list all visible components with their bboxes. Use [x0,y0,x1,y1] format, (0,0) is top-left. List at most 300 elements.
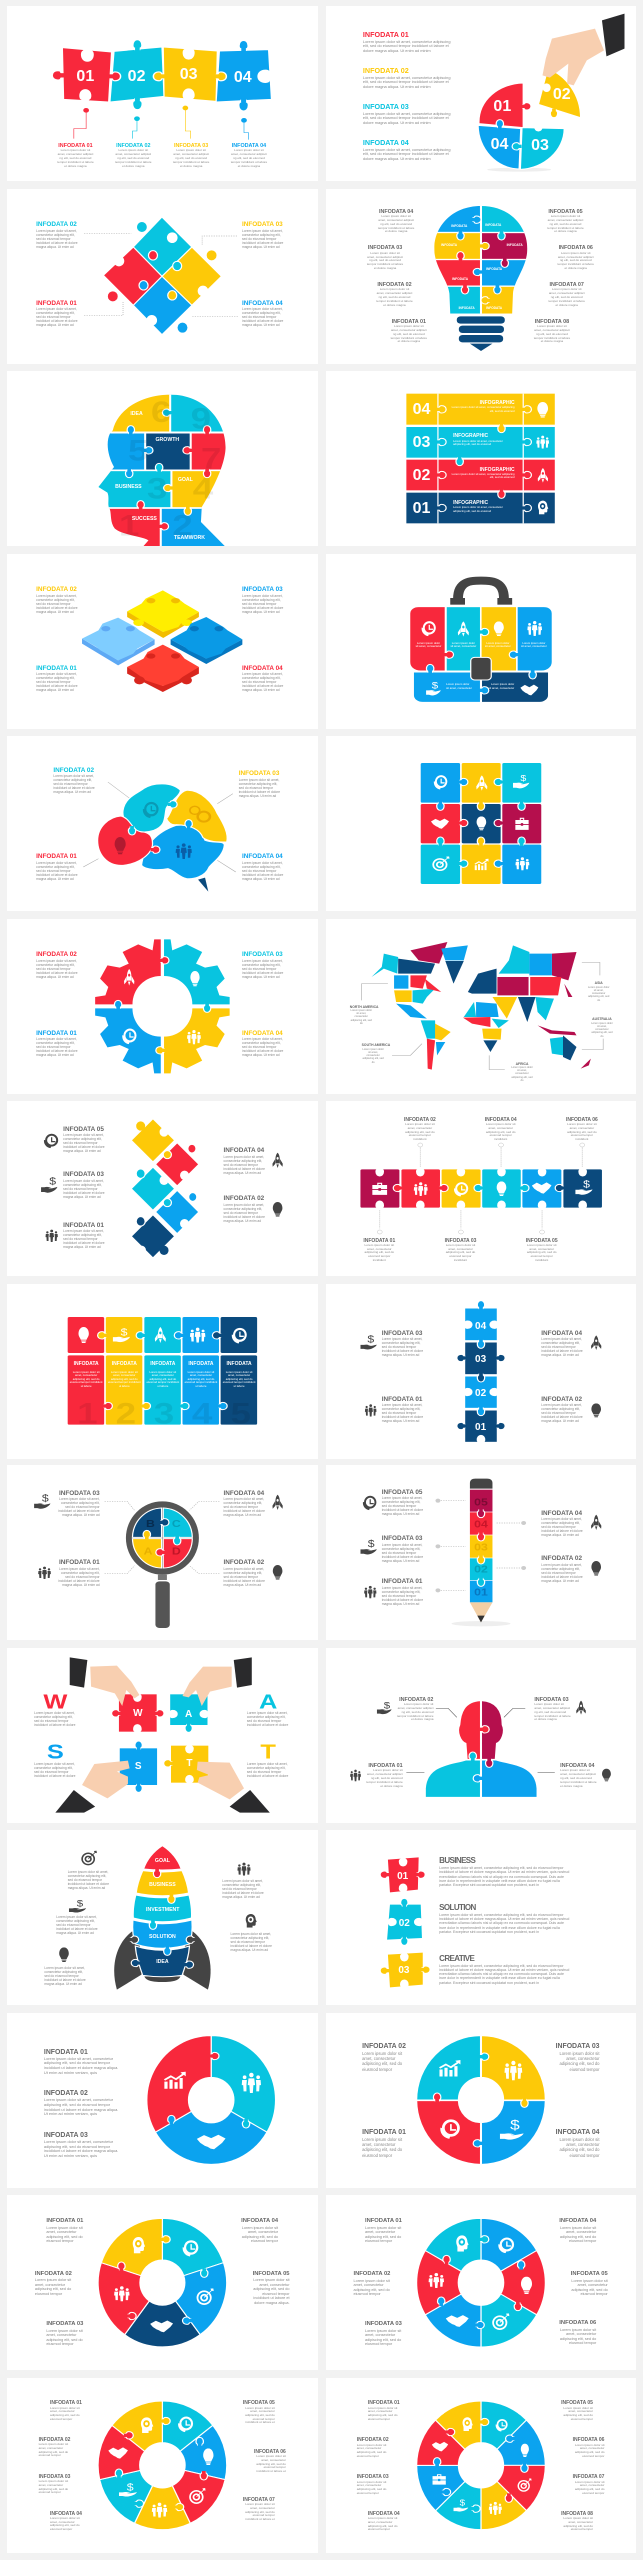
letters: B [146,1519,155,1530]
segment numbers: 01 [474,1588,487,1598]
text 01: Lorem ipsum dolor sit amet, consectetur adipiscing elit, sed do eiusmod tempor incididunt ut labore et dolore magna aliqua. Ut enim ad [382,1586,423,1606]
letters [144,1519,181,1558]
bulb glass pieces [434,206,528,314]
brain lobes [98,784,227,878]
text 03 [444,1238,477,1262]
text 02: Lorem ipsum dolor sit amet, consectetur adipiscing elit, sed do eiusmod tempor incididunt ut labore et dolore magna aliqua. Ut enim ad minim veniam, quis [44,2097,118,2116]
pieces [380,1857,430,1989]
label idea: IDEA [156,1959,169,1965]
text block 03: Lorem ipsum dolor sit amet, consectetur adipiscing elit, sed do eiusmod tempor incididunt ut labore et dolore magna aliqua. Ut enim ad [242,229,283,249]
card text: Lorem ipsum dolor sit amet, consectetur [485,641,511,648]
text block 03: INFODATA 03 [242,221,283,228]
faint numbers: 2 [172,509,193,542]
text 07: INFODATA 07 [573,2474,604,2480]
icons [122,969,201,1044]
text 04: Lorem ipsum dolor sit amet, consectetur adipisci ng elit, sed do eiusmod tempor incididunt ut labore et dolore magna [560,1768,597,1788]
letter S: S [135,1761,142,1772]
text block 03 [239,770,283,798]
text block 01: INFODATA 01 [36,665,77,672]
text block 01: INFODATA 01 [363,30,409,39]
dotted stems [377,1143,584,1234]
text 05: INFODATA 05 [253,2271,290,2277]
icons [350,1701,610,1781]
faint numbers: 3 [147,472,167,505]
text block 01: Lorem ipsum dolor sit amet, consectetur adipiscing elit, sed do eiusmod tempor incididunt ut labore et dolore magna aliqua. Ut enim ad [36,307,78,327]
text 02: INFODATA 02 [404,1117,436,1123]
text 04: Lorem ipsum dolor sit amet, consectetur adipiscing elit, sed do eiusmod tempor [242,2226,278,2243]
text 04: INFODATA 04 [224,1490,264,1497]
callout africa: AFRICA [516,1062,528,1066]
text block 01: INFODATA 01 [36,853,77,860]
text 01: INFODATA 01 [44,2049,88,2056]
number 01: 01 [397,1871,408,1882]
text block 02: Lorem ipsum dolor sit amet, consectetur adipiscing elit, sed do eiusmod tempor incididunt ut labore et dolore magna aliqua. Ut enim ad [224,1203,265,1223]
text S: Lorem ipsum dolor sit amet, consectetur adipiscing elit, sed do eiusmod tempor incididunt ut labore et dolore [34,1762,76,1778]
text 01: Lorem ipsum dolor sit amet, consectetur adipiscing elit, sed do eiusmod tempor [46,2226,83,2243]
callout north america: NORTH AMERICA [350,1005,378,1009]
text block 05: INFODATA 05 [63,1126,104,1133]
person graphic [326,1648,636,1823]
column text 5: INFODATA [227,1361,252,1367]
panel: head puzzle [7,371,318,546]
navy regions [398,958,576,1060]
panel: four part ring [326,2013,636,2188]
panel: five part ring [7,2195,318,2370]
text 01 [50,2400,84,2421]
dark icons: $ [49,1176,57,1187]
panel: three part ring [7,2013,318,2188]
text 04: Lorem ipsum dolor sit amet, consectetur adipiscing elit, sed do eiusmod tempor incididunt ut labore et dolore magna aliqua. Ut enim ad [541,1337,583,1357]
head pieces [94,392,228,546]
text 01: Lorem ipsum dolor sit amet, consectetur adipiscing elit, sed do eiusmod tempor incididunt ut labore et dolore magna aliqua. Ut enim ad [382,1403,423,1423]
icons: $ [520,774,527,783]
text A: Lorem ipsum dolor sit amet, consectetur adipiscing elit, sed do eiusmod tempor incididunt ut labore et dolore [247,1711,288,1727]
number 04: 04 [234,69,252,86]
text block 01 [63,1222,107,1249]
text 02 [404,1117,436,1142]
text 04: INFODATA 04 [541,1330,582,1337]
callout australia: Lorem ipsum dolor sit amet, consectetur adipiscing elit, sed do [591,1022,613,1038]
text 01: INFODATA 01 [368,2400,400,2406]
pencil graphic [326,1465,636,1640]
card text: Lorem ipsum dolor sit amet, consectetur [446,682,472,690]
diamond puzzle graphic [84,218,238,334]
text 05: Lorem ipsum dolor sit amet, consectetur adipiscing elit, sed do eiusmod tempor incididunt ut labore et [245,2406,275,2424]
text 04: Lorem ipsum dolor sit amet, consectetur adipiscing elit, sed do eiusmod tempor incididunt ut labore et dolore magna aliqua. Ut enim ad [224,1497,265,1517]
text 06 [252,2449,286,2474]
ring segments [98,2401,227,2529]
text block 02: Lorem ipsum dolor sit amet, consectetur adipiscing elit, sed do eiusmod tempor incididunt ut labore et dolore magna aliqua. Ut enim ad [53,774,95,794]
grid graphic [326,736,636,911]
number 01: 01 [493,98,511,115]
ring segments [416,2401,545,2529]
segment numbers: 05 [474,1498,487,1508]
big letters [43,1690,278,1763]
text creative [439,1953,570,1985]
letter W: W [133,1708,143,1719]
text solution [439,1902,570,1934]
text 03 [554,2042,600,2072]
icons [59,1851,257,1962]
number 04: 04 [475,1321,486,1332]
text business [439,1855,570,1887]
label goal: GOAL [155,1858,170,1864]
label solution: SOLUTION [149,1934,176,1940]
connector lines and dots [74,105,249,139]
text block 02 [363,66,450,89]
row text 01: INFOGRAPHIC [453,500,488,506]
panel: five rotated pieces [7,1101,318,1276]
text 01: Lorem ipsum dolor sit amet, consectetur adipisci ng elit, sed do eiusmod tempor incididunt ut labore et dolore magna [366,1768,403,1788]
text block 03 [363,102,450,125]
pieces [112,1692,210,1792]
text 02 [353,2271,393,2297]
dotted leaders [435,1499,526,1593]
panel: isometric puzzle [7,554,318,729]
text 04: Lorem ipsum dolor sit amet, consectetur adipiscing elit, sed do eiusmod tempor [559,2137,600,2158]
text block: infodata 01: INFODATA 01 [58,143,93,149]
label idea: IDEA [130,411,143,417]
text 05: INFODATA 05 [382,1489,422,1496]
faint numbers: 7 [201,442,221,475]
icons [114,2237,214,2332]
faint big numbers: 4 [192,1397,213,1430]
text 04: INFODATA 04 [50,2511,82,2517]
text 03: Lorem ipsum dolor sit amet, consectetur adipiscing elit, sed do eiusmod tempor incididunt [446,1243,475,1262]
text block 02: INFODATA 02 [36,951,77,958]
icons: $ [42,1494,50,1504]
row text 01 [453,500,503,513]
text 03: Lorem ipsum dolor sit amet, consectetur adipiscing elit, sed do eiusmod tempor incididunt ut labore et dolore magna aliqua. Ut enim ad [382,1543,423,1563]
panel: SWOT hands [7,1648,318,1823]
text 01 [44,2048,120,2075]
text 04 [368,2511,401,2532]
panel: six piece chain [326,1101,636,1276]
tabs [433,2053,528,2147]
text block 03: Lorem ipsum dolor sit amet, consectetur adipiscing elit, sed do eiusmod tempor incididunt ut labore et dolore magna aliqua. Ut enim ad minim [363,111,450,125]
text block 02: Lorem ipsum dolor sit amet, consectetur adipiscing elit, sed do eiusmod tempor incididunt ut labore et dolore magna aliqua. Ut enim ad [36,229,78,249]
ring graphic [7,2013,318,2188]
number 04: 04 [413,401,430,418]
magenta regions [410,942,590,1068]
text 01 [363,1238,396,1262]
text block 04 [363,138,450,161]
tabs [436,405,531,511]
text block 04: INFODATA 04 [242,665,283,672]
icons [439,2060,523,2140]
text block 03: Lorem ipsum dolor sit amet, consectetur adipisci ng elit, sed do eiusmod tempor incididunt ut labore et dolore magna [367,251,403,270]
text block: infodata 01: Lorem ipsum dolor sit amet, consectetur adipisci ng elit, sed do eiusmod tempor incididunt ut labore et dolore magna [57,148,94,168]
text 07: Lorem ipsum dolor sit amet, consectetur adipiscing elit, sed do eiusmod tempor [575,2480,604,2495]
yellow regions [394,990,517,1040]
text block 05: Lorem ipsum dolor sit amet, consectetur adipiscing elit, sed do eiusmod tempor incididunt ut labore et dolore magna aliqua. Ut enim ad [63,1133,105,1153]
panel: nine piece grid [326,736,636,911]
panel: diamond puzzle [7,189,318,364]
text block 04: Lorem ipsum dolor sit amet, consectetur adipiscing elit, sed do eiusmod tempor incididunt ut labore et dolore magna aliqua. Ut enim ad [242,861,283,881]
swot graphic [7,1648,318,1823]
text 05: INFODATA 05 [571,2271,608,2277]
text 03: Lorem ipsum dolor sit amet, consectetur adipiscing elit, sed do eiusmod tempor incididunt ut labore et dolore magna aliqua. Ut enim ad minim veniam, quis [44,2139,118,2158]
sleeves [55,1657,270,1813]
text block 01: INFODATA 01 [36,300,77,307]
blue piece [171,617,242,664]
ring segments [416,2218,545,2347]
panel: four puzzle pieces in a row [7,6,318,181]
text 06: INFODATA 06 [573,2437,604,2443]
ring graphic [7,2195,318,2370]
fins and nozzle [114,1932,211,1990]
text block 05: INFODATA 05 [548,209,583,215]
text block 08: Lorem ipsum dolor sit amet, consectetur adipisci ng elit, sed do eiusmod tempor incididunt ut labore et dolore magna [534,324,570,343]
row text 04 [452,400,515,413]
text 03: Lorem ipsum dolor sit amet, consectetur adipiscing elit, sed do eiusmod tempor [46,2329,83,2346]
text 03: Lorem ipsum dolor sit amet, consectetur adipiscing elit, sed do eiusmod tempor incididunt ut labore et dolore magna aliqua. Ut enim ad [58,1497,100,1517]
column text 4: Lorem ipsum dolor sit amet, consectetur adipiscing elit, sed do eiusmod tempor incididunt ut labore [185,1370,217,1388]
head graphic [98,394,226,546]
card text: Lorem ipsum dolor sit amet, consectetur [488,682,514,690]
text 01: INFODATA 01 [368,1763,403,1769]
text goal: Lorem ipsum dolor sit amet, consectetur adipiscing elit, sed do eiusmod tempor incididunt ut labore et dolore magna aliqua. Ut enim ad [68,1870,109,1890]
panel: pencil [326,1465,636,1640]
text creative: CREATIVE [439,1954,474,1963]
text 07: Lorem ipsum dolor sit amet, consectetur adipiscing elit, sed do eiusmod tempor incididunt ut labore et [245,2502,275,2521]
text 02: INFODATA 02 [224,1559,264,1566]
text 04: INFODATA 04 [560,1763,594,1769]
hand [542,13,624,85]
text 04: INFODATA 04 [368,2511,400,2517]
text block 06: INFODATA 06 [559,245,593,251]
label growth: GROWTH [156,437,179,443]
label success: SUCCESS [132,516,157,522]
big letters: W [43,1690,68,1713]
chain graphic [326,1101,636,1276]
dark icons: $ [367,1334,375,1345]
callout asia: ASIA [595,981,603,985]
icons: $ [459,2498,465,2507]
text 07 [571,2474,604,2495]
red piece [127,644,199,692]
text creative: Lorem ipsum dolor sit amet, consectetur adipiscing elit, sed do eiusmod tempor incididunt ut labore et dolore magna aliqua. Ut enim ad minim veniam, quis nostrud exercitation ullamco laboris nisi ut aliquip ex ea commodo consequat. Duis aute irure dolor in reprehenderit in voluptate velit esse cillum dolore eu fugiat nulla pariatur. Excepteur sint occaecat cupidatat non proident, sunt in [439,1964,569,1985]
panel: five columns [7,1284,318,1459]
text block 07: INFODATA 07 [550,282,584,288]
icons [34,1494,283,1580]
bulb graphic [434,206,528,351]
text block 02: INFODATA 02 [36,221,77,228]
panel: brain puzzle [7,736,318,911]
number 04: 04 [491,136,508,153]
chain pieces [360,1169,602,1207]
text solution: SOLUTION [439,1903,476,1912]
text block 03: INFODATA 03 [239,770,279,777]
text 02: Lorem ipsum dolor sit amet, consectetur adipiscing elit, sed do eiusmod tempor [362,2051,402,2072]
card text: Lorem ipsum dolor sit amet, consectetur [450,641,476,648]
briefcase graphic [410,576,552,702]
text 04: INFODATA 04 [559,2218,596,2224]
dotted leaders [105,1502,219,1574]
text 03: Lorem ipsum dolor sit amet, consectetur adipisci ng elit, sed do eiusmod tempor incididunt ut labore et dolore magna [534,1702,571,1721]
coloured rows [406,393,554,523]
four rotated pieces [103,217,221,334]
text block 01: INFODATA 01 [63,1222,104,1229]
column pieces [68,1317,257,1424]
label teamwork: TEAMWORK [174,535,205,541]
text block 04: Lorem ipsum dolor sit amet, consectetur adipiscing elit, sed do eiusmod tempor incididunt ut labore et dolore magna aliqua. Ut enim ad [242,307,283,327]
tabs [128,800,192,853]
text block: infodata 02: Lorem ipsum dolor sit amet, consectetur adipisci ng elit, sed do eiusmod tempor incididunt ut labore et dolore magna [115,148,152,168]
text block 04: INFODATA 04 [363,138,409,147]
text 02: Lorem ipsum dolor sit amet, consectetur adipiscing elit, sed do eiusmod tempor incididunt ut labore et dolore magna aliqua. Ut enim ad [541,1563,583,1583]
icons [431,774,529,871]
text block: infodata 03: INFODATA 03 [174,143,208,149]
tabs [98,1331,227,1409]
dark icons [360,1334,601,1417]
panel: light bulb puzzle [326,189,636,364]
text 06 [571,2437,604,2458]
text 01: INFODATA 01 [362,2129,406,2136]
column text 2: Lorem ipsum dolor sit amet, consectetur adipiscing elit, sed do eiusmod tempor incididunt ut labore [108,1370,141,1388]
faint big numbers: 1 [77,1397,98,1430]
ring graphic [326,2195,636,2370]
text T: Lorem ipsum dolor sit amet, consectetur adipiscing elit, sed do eiusmod tempor incididunt ut labore et dolore [247,1762,288,1778]
number 02: 02 [553,86,571,103]
label business: BUSINESS [149,1882,176,1888]
number 03: 03 [531,137,549,154]
text 01: INFODATA 01 [46,2218,83,2224]
text 02: Lorem ipsum dolor sit amet, consectetur adipiscing elit, sed do eiusmod tempor incididunt [405,1122,435,1141]
red regions [410,975,561,1069]
panel: business solution creative [326,1830,636,2005]
stacked rows graphic [406,394,555,524]
text block 01 [36,853,80,881]
text block 04 [242,1030,286,1057]
faint numbers: 5 [128,434,148,467]
icons [431,2417,531,2515]
text 01: Lorem ipsum dolor sit amet, consectetur adipiscing elit, sed do eiusmod tempor [368,2406,397,2421]
text 04: INFODATA 04 [556,2129,600,2136]
stem [198,877,208,891]
tabs [426,628,536,694]
row text 02 [452,467,515,479]
panel: rocket [7,1830,318,2005]
text 03: INFODATA 03 [365,2321,402,2327]
text 01: Lorem ipsum dolor sit amet, consectetur adipiscing elit, sed do eiusmod tempor incididunt ut labore et dolore magna aliqua. Ut enim ad [58,1567,100,1587]
text 03: INFODATA 03 [44,2132,88,2139]
segment numbers [474,1498,488,1598]
bulb base [456,316,504,351]
tabs [114,956,211,1054]
text 06: Lorem ipsum dolor sit amet, consectetur adipiscing elit, sed do eiusmod tempor incididunt ut labore et [256,2454,286,2473]
panel: gear puzzle [7,919,318,1094]
shadow [451,1621,510,1627]
text block 01 [36,1030,80,1057]
text 01 [55,1559,100,1587]
text 04: Lorem ipsum dolor sit amet, consectetur adipiscing elit, sed do eiusmod tempor [50,2516,80,2531]
big letters: A [259,1690,278,1713]
text block 01: Lorem ipsum dolor sit amet, consectetur adipiscing elit, sed do eiusmod tempor incididunt ut labore et dolore magna aliqua. Ut enim ad minim [363,39,450,53]
panel: eight part ring [326,2378,636,2553]
icons: $ [121,1327,128,1338]
text 05 [241,2400,275,2425]
puzzle pieces 01 to 04 [52,39,273,111]
text 02: INFODATA 02 [353,2271,390,2277]
text 05: INFODATA 05 [561,2400,593,2406]
text block 02: INFODATA 02 [36,586,77,593]
text block 02: Lorem ipsum dolor sit amet, consectetur adipisci ng elit, sed do eiusmod tempor incididunt ut labore et dolore magna [376,287,413,307]
column text 4: INFODATA [188,1361,214,1367]
text 03: INFODATA 03 [445,1238,476,1244]
ring graphic [326,2013,636,2188]
text 02: Lorem ipsum dolor sit amet, consectetur adipiscing elit, sed do eiusmod tempor [357,2443,386,2458]
text 01: INFODATA 01 [382,1396,422,1403]
text invest: Lorem ipsum dolor sit amet, consectetur adipiscing elit, sed do eiusmod tempor incididunt ut labore et dolore magna aliqua. Ut enim ad [56,1915,98,1935]
column text 4 [185,1361,217,1388]
row text 01: Lorem ipsum dolor sit amet, consectetur adipiscing elit, sed do eiusmod [453,505,503,513]
text 05: Lorem ipsum dolor sit amet, consectetur adipiscing elit, sed do eiusmod tempor incididunt ut labore et dolore magna aliqua. Ut enim ad [382,1496,423,1516]
clasp [470,657,491,680]
panel: world map puzzle [326,919,636,1094]
label goal: GOAL [178,477,193,483]
letter A: A [185,1709,192,1720]
text block: infodata 04: Lorem ipsum dolor sit amet, consectetur adipisci ng elit, sed do eiusmod tempor incididunt ut labore et dolore magna [231,148,267,168]
cyan regions [371,945,563,1055]
text block 03: INFODATA 03 [363,102,409,111]
number 02: 02 [128,68,145,85]
rocket body [133,1846,192,1977]
letters: C [172,1519,181,1530]
text 06: INFODATA 06 [254,2449,286,2455]
magnifier graphic [7,1465,318,1640]
text block 04: INFODATA 04 [242,300,283,307]
panel: person silhouette [326,1648,636,1823]
text block 02 [224,1195,268,1223]
callout south america: Lorem ipsum dolor sit amet, consectetur adipiscing elit, sed do [362,1048,384,1064]
head halves [458,1701,503,1759]
text 01: INFODATA 01 [59,1559,100,1566]
row text 03: INFOGRAPHIC [453,433,488,439]
text 04 [541,1510,586,1537]
text 03 [44,2131,120,2159]
blue regions [394,945,552,1055]
text 02 [541,1555,586,1583]
text 04: Lorem ipsum dolor sit amet, consectetur adipiscing elit, sed do eiusmod tempor [560,2226,596,2243]
notches and tabs [376,1167,586,1210]
column text 3 [146,1361,179,1388]
tabs [437,2236,524,2329]
faint numbers: 4 [193,472,214,505]
text 03: INFODATA 03 [59,1490,100,1497]
shadow [487,167,551,171]
text solution: Lorem ipsum dolor sit amet, consectetur adipiscing elit, sed do eiusmod tempor incididunt ut labore et dolore magna aliqua. Ut enim ad [230,1932,272,1952]
text 05: Lorem ipsum dolor sit amet, consectetur adipiscing elit, sed do eiusmod tempor incididunt [527,1243,556,1262]
faint numbers: 1 [119,509,139,542]
text 06: Lorem ipsum dolor sit amet, consectetur adipiscing elit, sed do eiusmod tempor [560,2328,596,2345]
text 02: Lorem ipsum dolor sit amet, consectetur adipiscing elit, sed do eiusmod tempor incididunt ut labore et dolore magna aliqua. Ut enim ad [541,1403,583,1423]
pencil tip [470,1603,492,1623]
text 03: Lorem ipsum dolor sit amet, consectetur adipiscing elit, sed do eiusmod tempor [39,2479,68,2494]
lens rim [126,1502,199,1575]
ring segments [416,2036,545,2164]
faint numbers: 9 [191,402,211,435]
interlocking tabs [456,216,508,304]
text 01 [362,2128,407,2158]
yellow piece [127,590,199,638]
piece label: INFODATA [452,277,468,281]
text block 04: INFODATA 04 [379,209,413,215]
icons: $ [77,1900,83,1909]
text 02 [35,2271,75,2296]
number 03: 03 [413,434,430,451]
panel: puzzle table rows [326,371,636,546]
